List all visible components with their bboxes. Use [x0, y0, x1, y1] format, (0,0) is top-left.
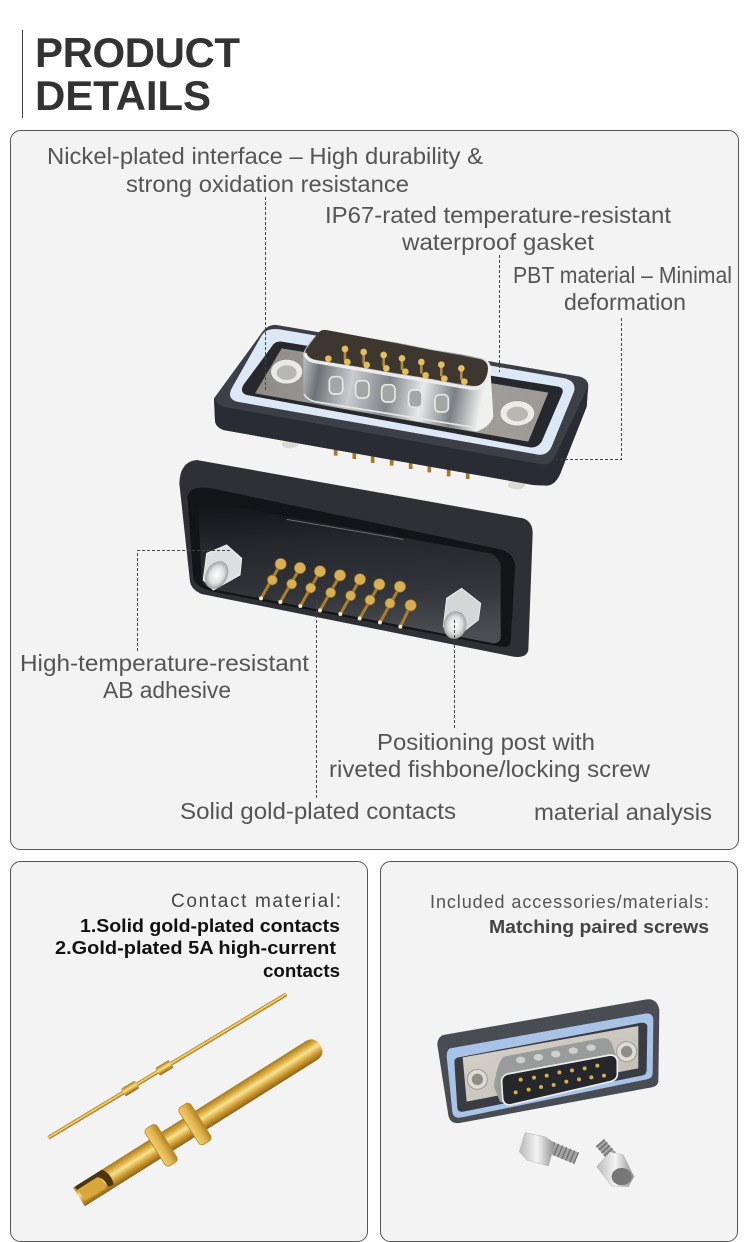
- label: PBT material: [513, 262, 732, 315]
- label: AB adhesive: AB adhesive: [103, 677, 231, 703]
- contact list: [55, 916, 340, 981]
- title: DETAILS: [35, 72, 211, 119]
- label: nickel-plated interface: Nickel-plated interface – High durability &: [47, 143, 483, 169]
- connector: male with gasket: [214, 325, 588, 489]
- icon: thick gold pin: [67, 1027, 332, 1216]
- contact pins: [325, 346, 468, 385]
- heading: included accessories: Included accessories/materials:: [430, 892, 709, 912]
- label: positioning post: Positioning post with: [377, 729, 595, 755]
- label: positioning post: [329, 729, 650, 782]
- label: material analysis: material analysis: [534, 799, 712, 825]
- label: PBT material: deformation: [564, 289, 686, 315]
- label: AB adhesive: High-temperature-resistant: [20, 650, 310, 676]
- contact pins: [514, 1064, 606, 1094]
- label: gold-plated contacts: Solid gold-plated contacts: [180, 798, 456, 824]
- label: AB adhesive: [20, 650, 310, 703]
- label: waterproof gasket: waterproof gasket: [401, 229, 595, 255]
- label: nickel-plated interface: strong oxidation resistance: [126, 171, 409, 197]
- connector: potted rear view: [179, 460, 533, 657]
- icon: thin gold pin: [46, 990, 289, 1142]
- hex post left: [200, 545, 242, 593]
- title: PRODUCT: [35, 29, 240, 76]
- label: PBT material: PBT material – Minimal: [513, 262, 732, 288]
- label: waterproof gasket: IP67-rated temperature-resistant: [325, 202, 672, 228]
- contact list: 2.Gold-plated 5A high-current: [55, 938, 336, 958]
- label: nickel-plated interface: [47, 143, 483, 197]
- panel: material analysis: [10, 130, 738, 850]
- hex post right: [441, 588, 481, 641]
- title: [22, 29, 240, 119]
- label: positioning post: riveted fishbone/locking screw: [329, 756, 650, 782]
- connector: front view: [437, 999, 659, 1123]
- leader lines: [138, 197, 622, 800]
- icon: hex screw: [519, 1133, 577, 1166]
- subheading: paired screws: Matching paired screws: [489, 917, 709, 937]
- contact list: contacts: [263, 961, 340, 981]
- label: waterproof gasket: [325, 202, 672, 255]
- panel: contact material: [10, 862, 368, 1242]
- icon: hex standoff: [597, 1143, 634, 1187]
- gold contacts: [259, 558, 416, 629]
- contact list: 1.Solid gold-plated contacts: [80, 916, 340, 936]
- heading: contact material: Contact material:: [171, 891, 341, 912]
- panel: included accessories: [380, 862, 738, 1242]
